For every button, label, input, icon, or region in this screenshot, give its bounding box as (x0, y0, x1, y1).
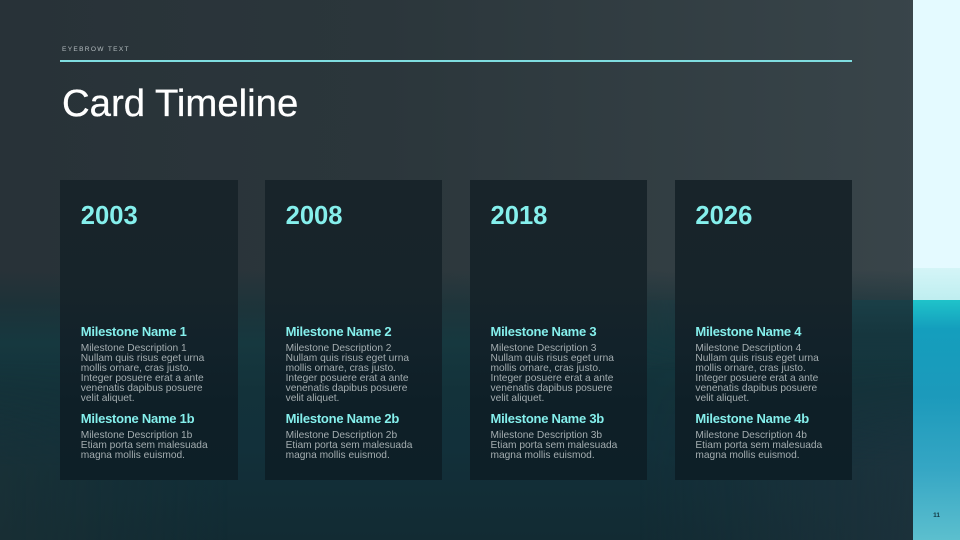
milestone description 1: Milestone Description 1 (81, 343, 187, 354)
milestone description 3 (490, 343, 614, 404)
title rule (60, 60, 852, 62)
milestone description 1b: magna mollis euismod. (81, 450, 185, 461)
milestone description 1: venenatis dapibus posuere (81, 383, 203, 394)
year: 2026 (695, 202, 752, 230)
milestone description 3: Milestone Description 3 (490, 343, 596, 354)
milestone description 4b: Etiam porta sem malesuada (695, 440, 822, 451)
milestone name 1: Milestone Name 1 (81, 324, 187, 339)
year: 2003 (81, 202, 138, 230)
eyebrow text: EYEBROW TEXT (62, 46, 130, 53)
milestone description 2: Milestone Description 2 (286, 343, 391, 354)
milestone description 1: mollis ornare, cras justo. (81, 363, 191, 374)
milestone description 2: venenatis dapibus posuere (286, 383, 407, 394)
milestone description 4 (695, 343, 819, 404)
milestone description 4: Nullam quis risus eget urna (695, 353, 819, 364)
title: Card Timeline (62, 82, 298, 124)
milestone name 2b: Milestone Name 2b (286, 411, 399, 426)
card: 2003 (60, 180, 238, 480)
year: 2018 (490, 202, 547, 230)
milestone description 4b: Milestone Description 4b (695, 430, 807, 441)
milestone description 2b: Milestone Description 2b (286, 430, 397, 441)
milestone description 3: venenatis dapibus posuere (490, 383, 612, 394)
milestone name 2: Milestone Name 2 (286, 324, 391, 339)
milestone description 4: Integer posuere erat a ante (695, 373, 818, 384)
milestone description 3b: Etiam porta sem malesuada (490, 440, 617, 451)
milestone name 4b: Milestone Name 4b (695, 411, 809, 426)
year: 2008 (286, 202, 343, 230)
milestone name 3: Milestone Name 3 (490, 324, 596, 339)
milestone description 1b: Etiam porta sem malesuada (81, 440, 208, 451)
milestone description 2: mollis ornare, cras justo. (286, 363, 396, 374)
page number: 11 (933, 512, 940, 519)
right strip: sky and sea (913, 0, 960, 540)
milestone description 2 (286, 343, 410, 404)
milestone description 1: Integer posuere erat a ante (81, 373, 204, 384)
milestone name 3b: Milestone Name 3b (490, 411, 604, 426)
milestone description 4b (695, 430, 822, 461)
milestone description 4: mollis ornare, cras justo. (695, 363, 806, 374)
milestone description 3b: magna mollis euismod. (490, 450, 595, 461)
milestone description 2: velit aliquet. (286, 393, 339, 404)
milestone description 2b: magna mollis euismod. (286, 450, 390, 461)
milestone description 4: venenatis dapibus posuere (695, 383, 817, 394)
milestone name 1b: Milestone Name 1b (81, 411, 194, 426)
milestone description 1b: Milestone Description 1b (81, 430, 192, 441)
card: 2018 (470, 180, 647, 480)
milestone description 2b: Etiam porta sem malesuada (286, 440, 412, 451)
milestone description 3: mollis ornare, cras justo. (490, 363, 601, 374)
milestone description 1: velit aliquet. (81, 393, 135, 404)
milestone description 3: Integer posuere erat a ante (490, 373, 613, 384)
milestone description 4: velit aliquet. (695, 393, 749, 404)
card: 2026 (675, 180, 852, 480)
milestone description 3: velit aliquet. (490, 393, 544, 404)
milestone description 4b: magna mollis euismod. (695, 450, 800, 461)
milestone description 3: Nullam quis risus eget urna (490, 353, 614, 364)
milestone name 4: Milestone Name 4 (695, 324, 801, 339)
milestone description 3b (490, 430, 618, 461)
card: 2008 (265, 180, 442, 480)
milestone description 1: Nullam quis risus eget urna (81, 353, 204, 364)
milestone description 2: Nullam quis risus eget urna (286, 353, 409, 364)
milestone description 2b (286, 430, 412, 461)
milestone description 3b: Milestone Description 3b (490, 430, 602, 441)
milestone description 1b (81, 430, 208, 461)
milestone description 2: Integer posuere erat a ante (286, 373, 408, 384)
milestone description 4: Milestone Description 4 (695, 343, 801, 354)
milestone description 1 (80, 343, 204, 404)
